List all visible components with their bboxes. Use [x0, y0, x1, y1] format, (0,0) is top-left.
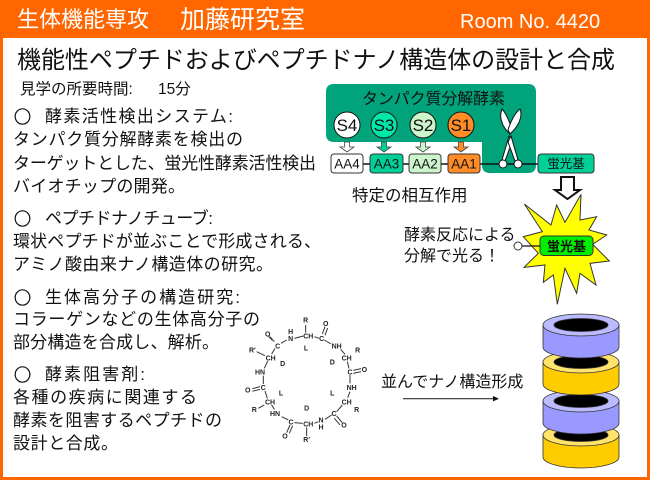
nanotube ring stack — [543, 314, 619, 468]
fluorophore box: 蛍光基 — [547, 157, 585, 171]
ring atoms: O — [245, 388, 251, 395]
text block: peptide nanotube — [13, 205, 321, 274]
text block: peptide nanotube: ペプチドナノチューブ: — [45, 208, 213, 228]
ring 2 yellow — [543, 351, 619, 395]
stereo labels: D — [280, 361, 285, 368]
ring atoms: O — [341, 423, 347, 430]
ring atoms: CH — [303, 334, 313, 341]
arrow S4 — [340, 142, 354, 152]
text block: biopolymer structure: コラーゲンなどの生体高分子の — [13, 310, 260, 329]
fluorophore box — [538, 154, 594, 173]
arrow S2 — [416, 142, 430, 152]
ring atoms: HN — [270, 411, 280, 418]
interaction label: 特定の相互作用 — [352, 186, 468, 205]
header: room number: Room No. 4420 — [460, 11, 600, 33]
ring atoms: O — [323, 321, 329, 328]
arrow: down outline — [555, 177, 580, 199]
subsite S3: S3 — [374, 116, 394, 135]
amino acid AA4: AA4 — [334, 156, 360, 172]
ring atoms: O — [282, 434, 288, 441]
ring 4 yellow — [543, 424, 619, 468]
ring atoms: C — [331, 411, 337, 418]
burst with fluorophore — [523, 194, 609, 304]
text block: peptide nanotube: ○ — [14, 205, 31, 230]
text block: enzyme inhibitors: 各種の疾病に関連する — [13, 388, 197, 407]
amino acid AA3: AA3 — [374, 156, 399, 172]
text block: peptide nanotube: 環状ペプチドが並ぶことで形成される、 — [13, 232, 321, 251]
stereo labels: L — [304, 345, 309, 352]
stereo labels: L — [330, 390, 335, 397]
ring atoms: R — [303, 318, 308, 325]
ring atoms: N — [318, 418, 324, 425]
ring atoms: C — [275, 344, 280, 351]
amino acid AA4 — [331, 154, 363, 173]
amino acid AA1: AA1 — [451, 156, 477, 172]
text block: enzyme activity detection: 酵素活性検出システム: — [45, 107, 233, 126]
header: lab name — [17, 6, 305, 34]
text block: biopolymer structure: ○ — [14, 284, 31, 309]
ring atoms: R — [354, 407, 359, 414]
callout: glow note: 酵素反応による — [404, 226, 516, 244]
ring atoms — [245, 318, 368, 444]
subsite S4 — [334, 112, 360, 138]
header: lab name: 生体機能専攻 — [17, 7, 149, 32]
visit time: 15分 — [158, 80, 191, 98]
panel: protease — [326, 84, 536, 173]
amino acid AA2 — [409, 154, 441, 173]
text block: enzyme inhibitors — [13, 361, 222, 453]
subsite S1 — [448, 112, 474, 138]
subsite S3 — [371, 112, 397, 138]
ring atoms: H — [318, 424, 324, 431]
amino acid AA3 — [370, 154, 403, 173]
ring atoms: C — [319, 336, 324, 343]
ring atoms: NH — [332, 344, 342, 351]
ring atoms: CH — [266, 355, 276, 362]
connecting backbone — [363, 163, 538, 165]
callout: glow note — [404, 226, 540, 265]
ring atoms: R' — [303, 437, 310, 444]
ring atoms: C — [288, 419, 294, 426]
yellow starburst — [523, 194, 609, 304]
text block: enzyme inhibitors: 酵素阻害剤: — [45, 365, 145, 384]
amino acid AA2: AA2 — [412, 156, 438, 172]
header: lab name: 加藤研究室 — [180, 6, 305, 34]
cyclic peptide structure — [245, 318, 368, 444]
ring atoms: CH — [265, 399, 275, 406]
stereo labels — [279, 345, 335, 412]
stereo labels: D — [304, 405, 309, 412]
visit time: 見学の所要時間: — [20, 80, 133, 98]
enzyme label: タンパク質分解酵素 — [362, 90, 505, 108]
ring atoms: O — [362, 367, 368, 374]
text block: enzyme activity detection: ○ — [14, 103, 31, 128]
ring atoms: N — [288, 336, 293, 343]
arrow S1 — [454, 142, 468, 152]
arrow: assembly — [403, 396, 499, 401]
visit time — [20, 80, 191, 98]
callout: glow note: 分解で光る！ — [404, 247, 500, 265]
ring atoms: CH — [303, 422, 313, 429]
ring 3 purple — [543, 390, 619, 434]
subsite S2: S2 — [413, 116, 433, 135]
arrow S3 — [377, 142, 391, 152]
ring atoms: C — [261, 385, 266, 392]
stereo labels: L — [279, 390, 284, 397]
text block: biopolymer structure: 生体高分子の構造研究: — [45, 288, 240, 307]
assembly label: 並んでナノ構造形成 — [381, 373, 523, 391]
ring atoms: O — [265, 332, 271, 339]
ring atoms: CH — [342, 355, 352, 362]
subsite S2 — [410, 112, 436, 138]
ring atoms: HN — [255, 369, 265, 376]
text block: biopolymer structure — [13, 284, 260, 352]
enzyme diagram — [326, 84, 594, 173]
text block: biopolymer structure: 部分構造を合成し、解析。 — [13, 333, 219, 352]
text block: enzyme inhibitors: ○ — [14, 361, 31, 386]
ring atoms: R' — [249, 348, 256, 355]
ring atoms: R — [252, 407, 257, 414]
ring atoms: NH — [347, 385, 357, 392]
ring atoms: R — [355, 348, 360, 355]
text block: peptide nanotube: アミノ酸由来ナノ構造体の研究。 — [13, 255, 273, 274]
ring 1 purple — [543, 314, 619, 358]
text block: enzyme activity detection: バイオチップの開発。 — [13, 177, 185, 196]
stereo labels: D — [330, 359, 335, 366]
subsite S1: S1 — [451, 116, 471, 135]
text block: enzyme activity detection — [13, 103, 316, 196]
ring bonds — [252, 325, 361, 436]
title: 機能性ペプチドおよびペプチドナノ構造体の設計と合成 — [17, 47, 615, 74]
ring atoms: C — [347, 369, 353, 376]
ring atoms: H — [288, 329, 293, 336]
text block: enzyme inhibitors: 酵素を阻害するペプチドの — [13, 411, 222, 430]
text block: enzyme activity detection: ターゲットとした、蛍光性酵素活性検出 — [13, 154, 316, 173]
ring atoms: CH — [342, 399, 352, 406]
text block: enzyme inhibitors: 設計と合成。 — [13, 434, 118, 453]
subsite S4: S4 — [337, 116, 357, 135]
text block: enzyme activity detection: タンパク質分解酵素を検出の — [13, 130, 243, 149]
fluorophore label: 蛍光基 — [547, 239, 586, 254]
amino acid AA1 — [448, 154, 480, 173]
icon: scissors — [499, 109, 522, 168]
